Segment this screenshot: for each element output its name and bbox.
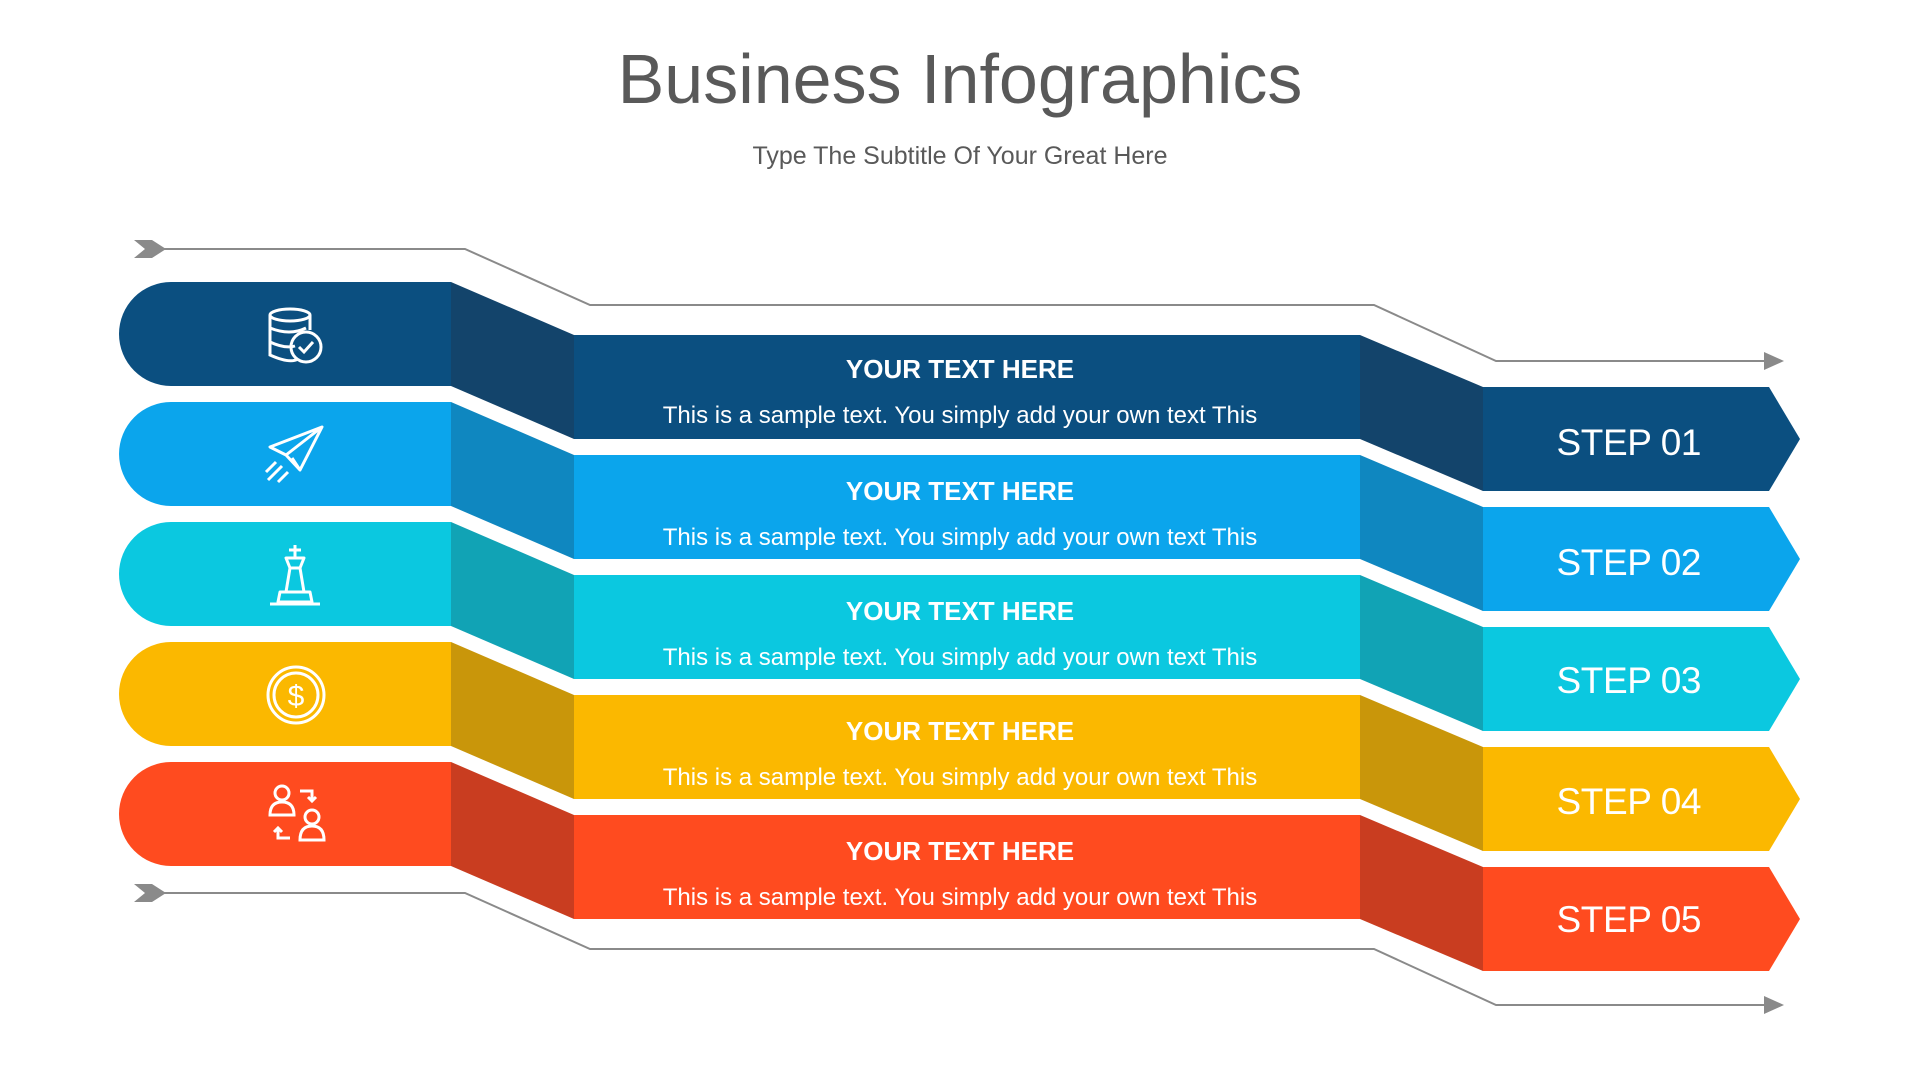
row: step 01: YOUR TEXT HERE (846, 354, 1074, 384)
row: step 03: STEP 03 (1556, 660, 1702, 701)
row: step 04: STEP 04 (1556, 781, 1702, 822)
row: step 05 (119, 762, 1800, 971)
row: step 04: YOUR TEXT HERE (846, 716, 1074, 746)
row: step 02: YOUR TEXT HERE (846, 476, 1074, 506)
row: step 03: YOUR TEXT HERE (846, 596, 1074, 626)
row: step 04: This is a sample text. You simply add your own text This (663, 764, 1257, 791)
row: step 02: STEP 02 (1556, 542, 1702, 583)
row: step 01 (119, 282, 1800, 491)
icon: paper plane (266, 427, 322, 482)
row: step 03 (119, 522, 1800, 731)
subtitle: Type The Subtitle Of Your Great Here (752, 142, 1168, 170)
row: step 05: STEP 05 (1556, 899, 1702, 940)
icon: dollar coin (268, 667, 324, 723)
icon: database check (270, 309, 321, 362)
row: step 02 (119, 402, 1800, 611)
row: step 04: $ (288, 680, 305, 713)
icon: chess king (270, 545, 320, 604)
row: step 05: This is a sample text. You simply add your own text This (663, 884, 1257, 911)
icon: people exchange (270, 786, 324, 840)
row: step 01: STEP 01 (1556, 422, 1702, 463)
row: step 02: This is a sample text. You simply add your own text This (663, 524, 1257, 551)
row: step 03: This is a sample text. You simply add your own text This (663, 644, 1257, 671)
row: step 04 (119, 642, 1800, 851)
row: step 01: This is a sample text. You simply add your own text This (663, 402, 1257, 429)
arrow: bottom connector line (134, 884, 1784, 1014)
arrow: top connector line (134, 240, 1784, 370)
row: step 05: YOUR TEXT HERE (846, 836, 1074, 866)
title: Business Infographics (618, 40, 1302, 118)
